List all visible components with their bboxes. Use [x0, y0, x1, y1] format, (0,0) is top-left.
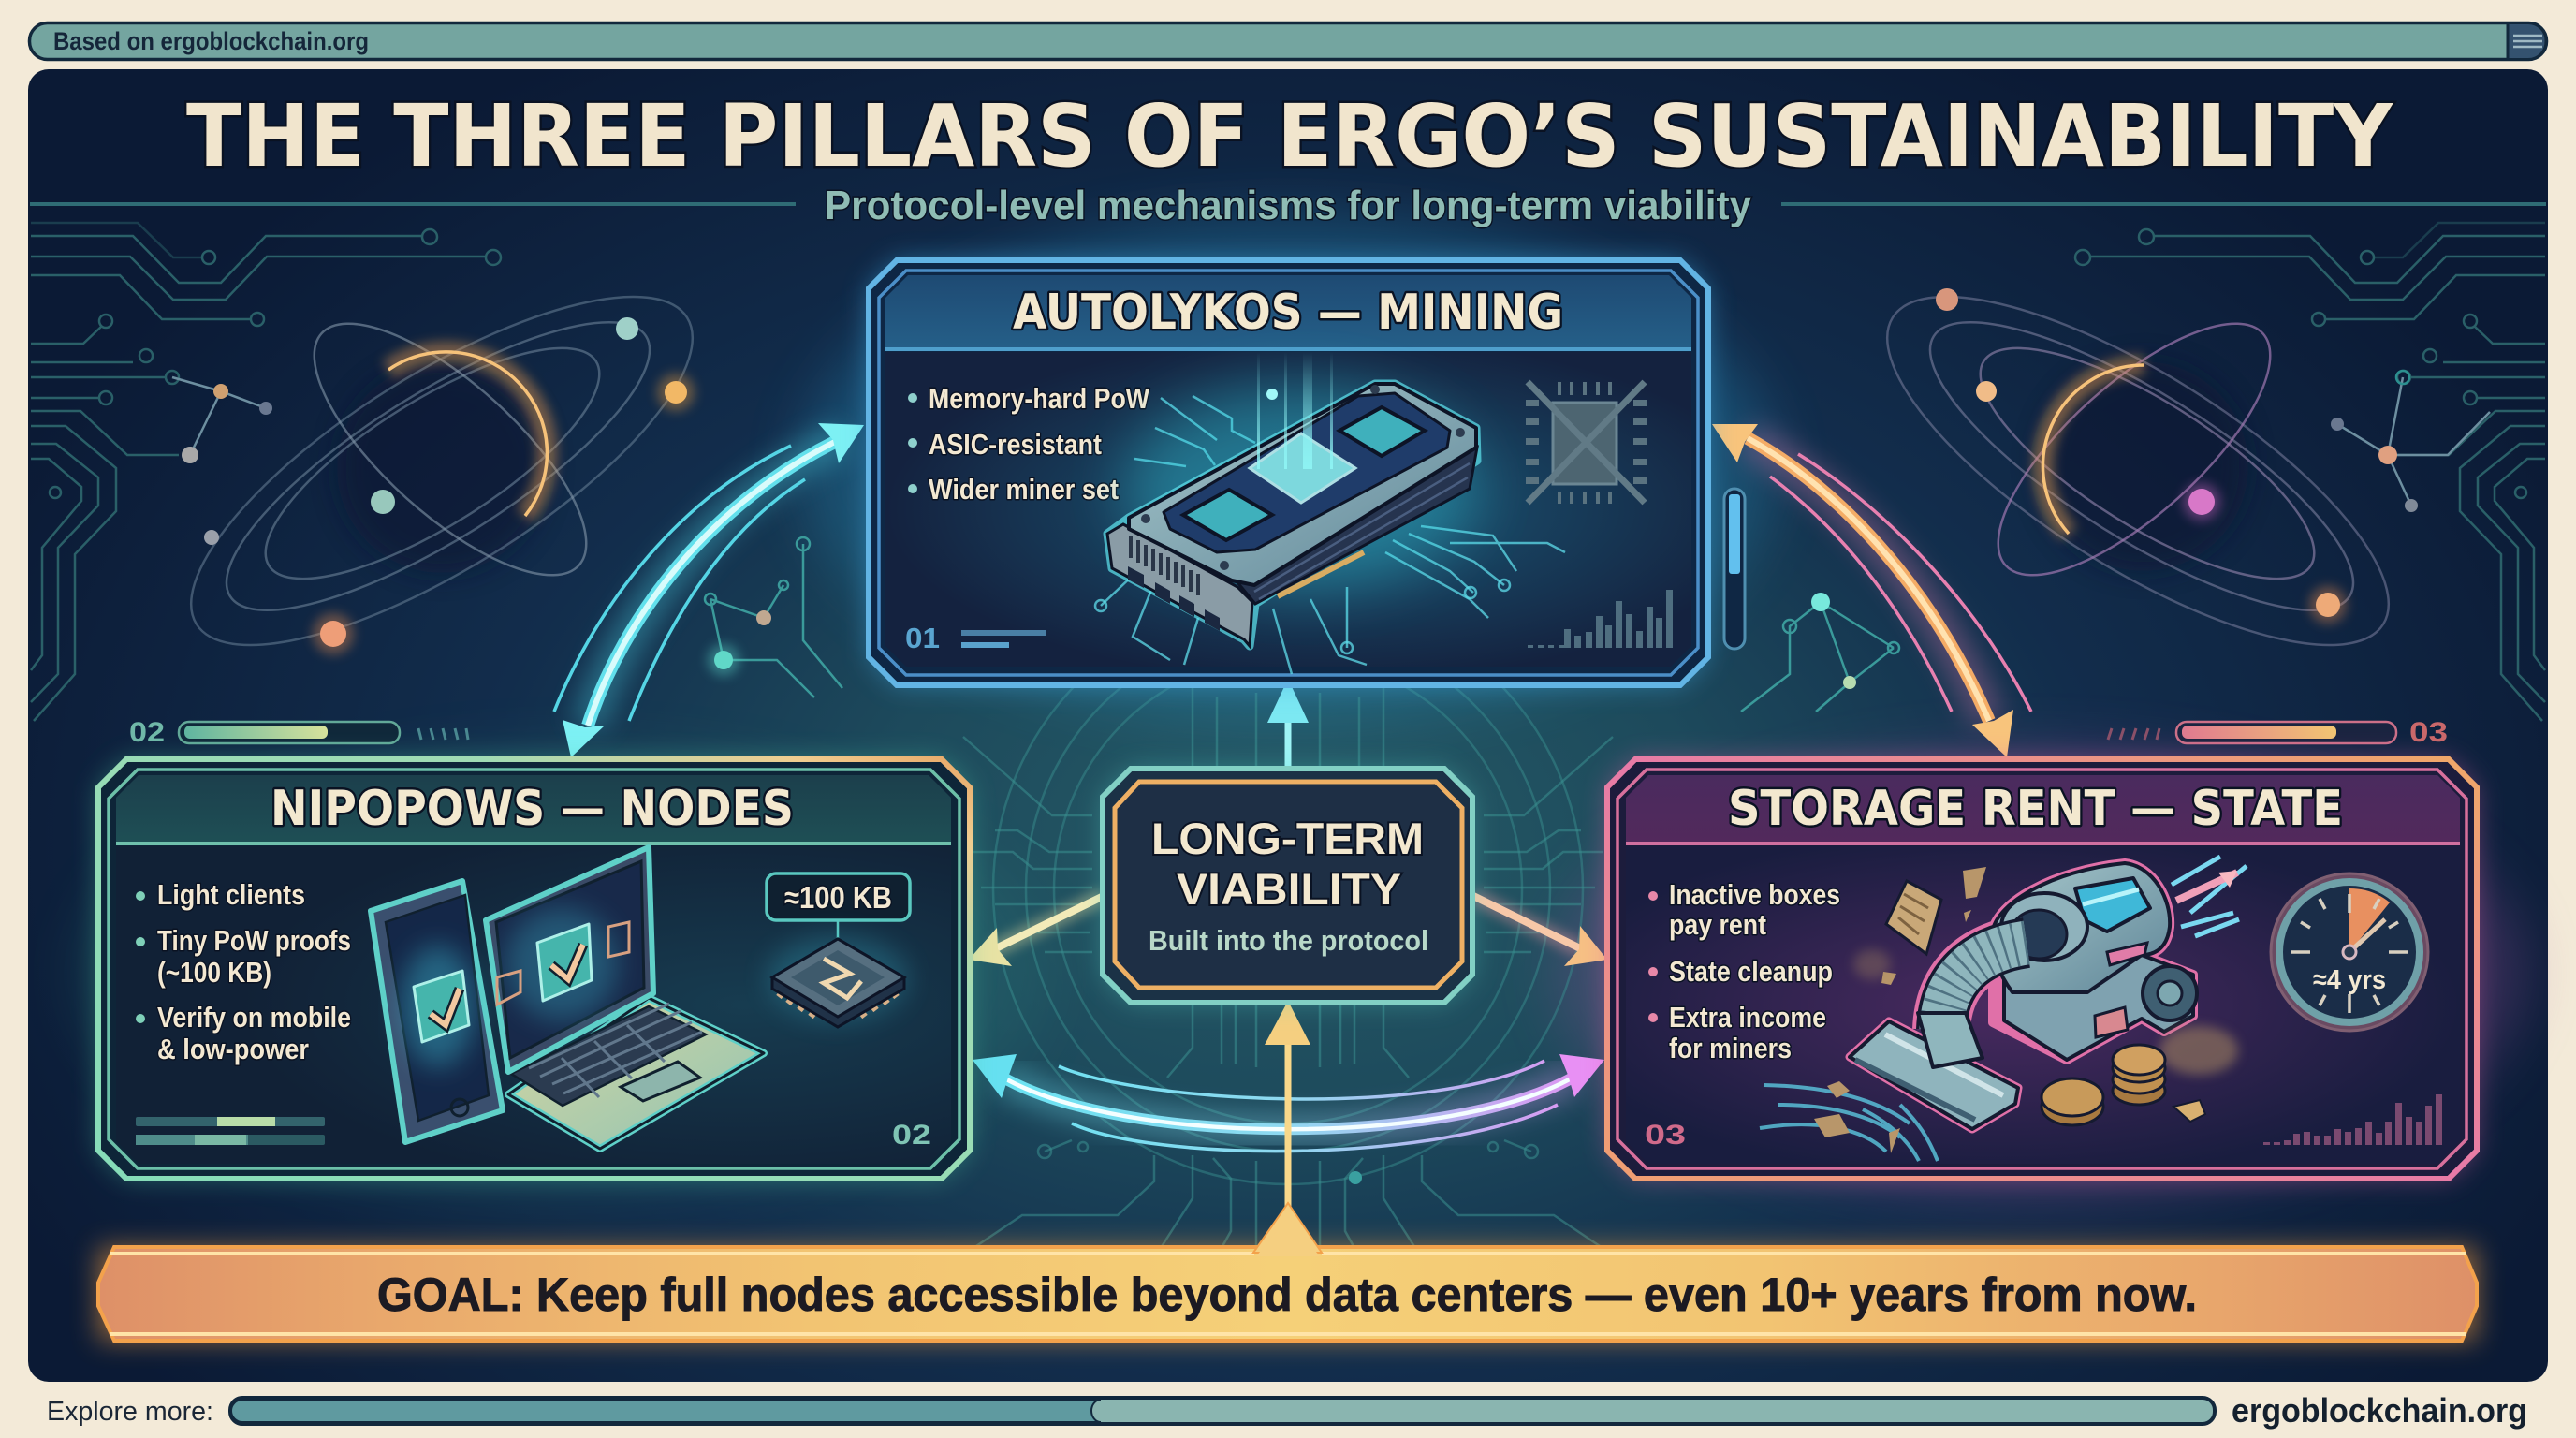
central circuit traces — [963, 594, 1583, 1248]
bullet list: ASIC-resistant — [929, 428, 1102, 461]
icon: light beams — [1257, 352, 1333, 469]
bullet list: Wider miner set — [929, 473, 1119, 506]
number 01 and status bars — [905, 622, 1046, 654]
number 03: 03 — [1645, 1120, 1686, 1151]
source credit: Based on ergoblockchain.org — [53, 27, 369, 55]
icon: gpu card — [1107, 384, 1479, 646]
state 03 status bar — [2108, 717, 2448, 748]
top bar — [30, 22, 2546, 60]
number 02: 02 — [892, 1120, 931, 1151]
right node network — [2331, 371, 2490, 512]
footer progress — [230, 1398, 2215, 1424]
bullet list: Tiny PoW proofs — [157, 924, 351, 957]
footer bar — [47, 1391, 2527, 1430]
icon: small chip — [768, 936, 908, 1027]
callout: 100 KB — [767, 873, 910, 938]
icon: laptop with verification tick — [486, 847, 764, 1149]
title: THE THREE PILLARS OF ERGO’S SUSTAINABILITY — [186, 86, 2393, 186]
bullet list: (~100 KB) — [157, 956, 271, 989]
node 02 status bar — [129, 717, 468, 748]
bullet list — [1648, 878, 1840, 1064]
icon: crossed-out asic chip — [1526, 382, 1647, 504]
icon: phone with verification tick — [371, 881, 503, 1142]
arrow: goal to center — [1265, 1001, 1310, 1217]
bullet list: for miners — [1669, 1032, 1792, 1064]
icon: blue swoosh debris — [1760, 1085, 1938, 1161]
hub heading: VIABILITY — [1177, 864, 1401, 914]
arrow: nipopows to storage rent, double ended — [973, 1054, 1604, 1152]
bullet list: Verify on mobile — [157, 1001, 351, 1034]
panel: nipopows nodes — [98, 759, 970, 1179]
explore label: Explore more: — [47, 1397, 213, 1427]
arrow: nipopows to autolykos cycle — [554, 423, 864, 757]
bullet list: & low-power — [157, 1033, 309, 1065]
arrow: center to autolykos — [1267, 679, 1309, 772]
bullet list: pay rent — [1669, 908, 1766, 941]
mid-right node network — [1741, 593, 1899, 712]
website link: ergoblockchain.org — [2232, 1391, 2527, 1430]
mid-left node network — [705, 537, 842, 697]
icon: coins — [2042, 1045, 2165, 1125]
card heading: STORAGE RENT — STATE — [1728, 781, 2343, 837]
card heading: AUTOLYKOS — MINING — [1013, 285, 1563, 341]
goal banner — [98, 1203, 2477, 1341]
histogram — [2263, 1094, 2442, 1145]
bullet list: Memory-hard PoW — [929, 382, 1150, 415]
arrow: center to storage rent — [1473, 896, 1607, 966]
icon: vacuum cleaner — [1850, 863, 2197, 1129]
icon: speed lines — [2172, 857, 2247, 936]
panel: long-term viability hub — [1103, 769, 1472, 1003]
status bars — [136, 1117, 325, 1145]
icon: gpu circuit traces — [1095, 396, 1565, 674]
center glow accents — [75, 215, 2527, 1198]
node 02 status bar: 02 — [129, 717, 165, 748]
left node network — [172, 377, 272, 463]
bullet list — [136, 878, 351, 1065]
hub heading: LONG-TERM — [1151, 814, 1424, 863]
icon: clock rent timer — [2271, 873, 2428, 1031]
arrow: center to nipopows — [969, 896, 1104, 966]
section rule lines — [30, 202, 2546, 206]
subtitle: Protocol-level mechanisms for long-term viability — [825, 183, 1752, 228]
left circuit traces — [31, 223, 501, 721]
bullet list: State cleanup — [1669, 955, 1833, 988]
card heading: NIPOPOWS — NODES — [271, 781, 794, 837]
hub tagline: Built into the protocol — [1149, 924, 1428, 957]
callout: 100 KB: ≈100 KB — [784, 880, 892, 915]
panel: autolykos mining — [869, 260, 1708, 685]
icon: clock rent timer: ≈4 yrs — [2313, 965, 2386, 995]
bullet list: Light clients — [157, 878, 305, 911]
arrow: autolykos to storage rent cycle — [1712, 424, 2031, 757]
state 03 status bar: 03 — [2409, 717, 2448, 748]
bullet list — [908, 382, 1150, 506]
bullet list: Extra income — [1669, 1001, 1826, 1034]
icon: paper and debris — [1814, 867, 2238, 1153]
number 01 and status bars: 01 — [905, 622, 940, 654]
right circuit traces — [2075, 223, 2545, 721]
right orbit diagram — [1841, 235, 2435, 707]
small teal node — [1349, 1171, 1362, 1184]
panel: storage rent state — [1607, 759, 2477, 1179]
progress gauge vertical — [1724, 489, 1745, 649]
background circuits and orbits — [30, 204, 2546, 1248]
goal text: GOAL: Keep full nodes accessible beyond data centers — even 10+ years from now. — [377, 1269, 2197, 1321]
central circuit traces mirrored — [993, 594, 1613, 1248]
left orbit diagram — [145, 235, 739, 707]
bullet list: Inactive boxes — [1669, 878, 1840, 911]
top bar menu cap — [2508, 22, 2546, 60]
hub heading — [1151, 814, 1424, 914]
histogram — [1528, 590, 1673, 648]
